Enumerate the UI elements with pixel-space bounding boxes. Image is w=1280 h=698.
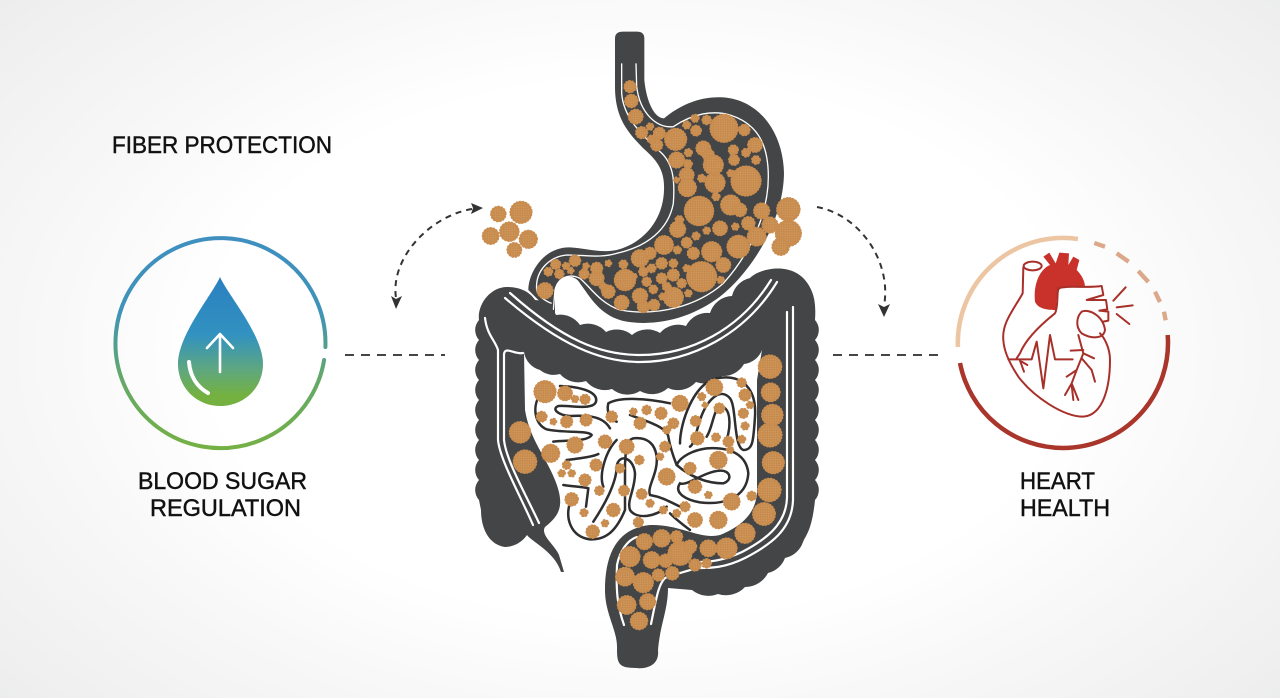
label: blood sugar regulation bbox=[138, 468, 307, 522]
label: blood sugar regulation: BLOOD SUGAR bbox=[138, 468, 307, 495]
connector: right dashed line bbox=[833, 354, 943, 356]
fiber cluster: floating left bbox=[483, 202, 536, 256]
panel: heart health bbox=[958, 238, 1168, 522]
arrow: curved left bbox=[391, 203, 483, 309]
label: heart health: HEALTH bbox=[1020, 495, 1110, 522]
fiber cluster: escaping right bbox=[763, 199, 800, 254]
label: heart health: HEART bbox=[1020, 468, 1095, 495]
icon ring: blood sugar bbox=[115, 238, 325, 448]
connector: left dashed line bbox=[345, 354, 445, 356]
fiber particles: stomach bbox=[483, 82, 800, 312]
stomach and esophagus bbox=[528, 32, 784, 323]
small intestine bbox=[535, 377, 755, 539]
icon: blood drop with up arrow bbox=[178, 277, 263, 406]
panel: blood sugar regulation bbox=[115, 238, 325, 522]
colon inner lines bbox=[485, 280, 793, 625]
arrow: curved right bbox=[817, 207, 890, 317]
icon: anatomical heart bbox=[1003, 253, 1133, 417]
large intestine bbox=[475, 268, 819, 668]
icon ring: heart bbox=[958, 238, 1168, 448]
fiber particles: intestines bbox=[510, 356, 783, 629]
title: FIBER PROTECTION bbox=[112, 132, 332, 159]
label: heart health bbox=[1020, 468, 1110, 522]
label: blood sugar regulation: REGULATION bbox=[150, 495, 301, 522]
